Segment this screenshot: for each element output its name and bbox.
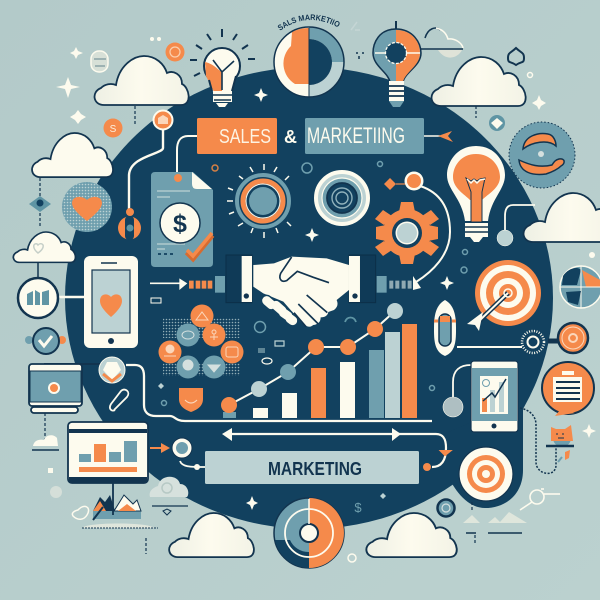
mountains bottom right [463, 512, 527, 533]
orange shield [179, 388, 203, 412]
light bulb: right teal and orange [373, 21, 421, 107]
cloud: bottom left [169, 513, 254, 557]
cloud: bottom right [366, 513, 457, 557]
icon: node with lock [384, 172, 424, 190]
pie chart: top [274, 27, 344, 97]
small top stickers [151, 298, 356, 389]
bar chart [223, 324, 417, 418]
icon: dashed circle swirl [509, 122, 575, 188]
concentric target rings [316, 172, 368, 224]
presentation chart board [68, 422, 148, 483]
icon: dollar badge: S [110, 124, 117, 135]
orange circles [158, 304, 244, 364]
small diamond [380, 493, 386, 499]
icon: orange badge right [558, 323, 588, 353]
magnifier [520, 489, 560, 510]
right cuff [349, 255, 376, 303]
connector: sales label to document [177, 136, 197, 175]
label: marketing: MARKETIING [307, 123, 405, 148]
central navy circle [65, 67, 553, 529]
right side sparkles [351, 22, 524, 131]
document with dollar [151, 172, 213, 267]
sun ring [227, 164, 291, 238]
label: marketing [305, 118, 424, 154]
icon: outlined oval mask [91, 51, 108, 72]
light bulb: left [190, 29, 255, 107]
small cloud under laptop [32, 435, 59, 450]
mountain scene [82, 483, 158, 528]
cloud connectors [40, 106, 476, 554]
hexagon node [99, 357, 125, 383]
small badge bottom center [438, 500, 454, 516]
half cloud sketch [421, 28, 463, 58]
line: phone to circle [58, 296, 84, 298]
cat on shelf [520, 408, 574, 473]
clasped hands [253, 257, 349, 327]
dollar sign: $ [354, 500, 362, 515]
connector: top left node to mechanism [129, 125, 163, 212]
cloud: right [524, 193, 600, 242]
icon: orange badge [166, 42, 184, 62]
baseline connector [126, 365, 432, 421]
icon: orange node [154, 110, 172, 130]
right connector and arrow [377, 276, 412, 293]
target with arrow [467, 260, 541, 331]
laptop [29, 364, 110, 413]
handshake [150, 255, 412, 327]
small cloud with target [150, 477, 188, 515]
connector: cloud to bulb node [497, 205, 535, 246]
pie chart: bottom [274, 498, 344, 568]
paperclip [110, 390, 128, 411]
burst [522, 331, 544, 353]
icon: orange mechanism [118, 208, 141, 240]
curved arrow [413, 186, 450, 290]
arrow from marketing label [424, 131, 453, 142]
dot grids [163, 318, 240, 376]
globe [560, 266, 600, 308]
document with dollar: $ [173, 210, 187, 238]
left cuff [226, 255, 252, 303]
gear [375, 202, 439, 264]
cloud: top right [432, 57, 526, 106]
connector: light node to tablet [443, 365, 471, 417]
cloud: small left [13, 232, 75, 262]
target: bottom right [459, 447, 513, 501]
cluster glyphs [164, 312, 238, 357]
icon: chart circle [18, 278, 58, 318]
list circle [542, 362, 594, 416]
arrow to small circle [150, 443, 170, 453]
line: cloud to circle [37, 262, 39, 278]
cloud: left [32, 133, 113, 177]
phone with heart [84, 256, 138, 348]
label: marketing lower [205, 451, 419, 484]
small circle badge [172, 438, 192, 458]
icon: dollar badge [104, 118, 122, 138]
capsule [434, 300, 456, 356]
cloud: top left [95, 56, 189, 105]
trend line with points [221, 303, 403, 413]
icon: orange gear small [212, 165, 218, 171]
label: marketing lower: MARKETING [268, 459, 362, 479]
icon: eye diamond [29, 196, 51, 212]
phone with chart [471, 361, 518, 432]
ampersand: & [284, 127, 297, 147]
left arrow and connector [150, 276, 225, 293]
connector: capsule to burst [457, 346, 522, 348]
icon: heart circle [62, 182, 112, 232]
small circles near title [162, 162, 468, 406]
icon cluster [158, 304, 244, 378]
light bulb: large orange [447, 146, 505, 242]
two way arrow [222, 428, 450, 471]
connector into lower label [180, 461, 205, 470]
connector: burst to orange badge [548, 338, 560, 344]
label: sales: SALES [219, 126, 271, 148]
curved small heading: SALS MARKETIIO [278, 14, 340, 30]
label: sales [197, 118, 277, 154]
icon: check circle [25, 328, 66, 354]
teal circles [176, 324, 226, 378]
icon: small cloud heart [34, 244, 43, 253]
